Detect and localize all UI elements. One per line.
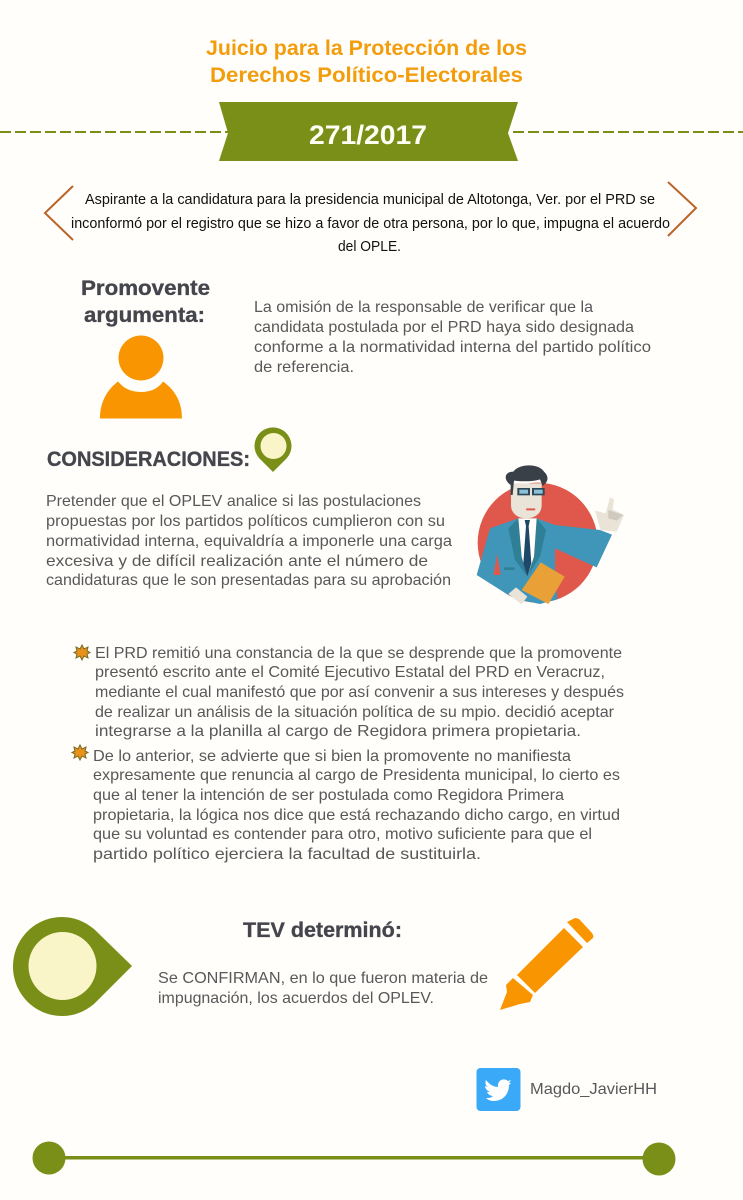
text: promovente argument: La omisión de la responsable de verificar que la [254,299,593,316]
bullet text 2: que su voluntad es contender para otro, motivo suficiente para que el [93,826,592,843]
text: consideraciones: Pretender que el OPLEV analice si las postulaciones [46,493,421,510]
text: ruling: impugnación, los acuerdos del OPLEV. [158,990,434,1007]
icon: bullet star 1 [74,645,90,660]
text: promovente argument: de referencia. [254,359,354,376]
title: Juicio para la Protección de los [206,37,527,60]
heading: Promovente argumenta [81,276,210,327]
bullet text 2: De lo anterior, se advierte que si bien la promovente no manifiesta [93,748,571,765]
text: promovente argument [254,299,651,376]
bullet text 2: partido político ejerciera la facultad de sustituirla. [93,846,481,863]
bullet text 1: mediante el cual manifestó que por así convenir a sus intereses y después [95,684,624,701]
heading: Promovente argumenta: argumenta: [84,303,205,327]
icon: pencil [500,918,593,1010]
text: consideraciones: propuestas por los partidos políticos cumplieron con su [46,513,445,530]
intro with chevrons [45,182,696,255]
bullet text 1: de realizar un análisis de la situación política de su mpio. decidió aceptar [95,704,615,721]
icon: person [100,336,182,418]
icon: small map pin [254,427,292,472]
bullet text 1: El PRD remitió una constancia de la que se desprende que la promovente [95,645,622,662]
bullet text 2: expresamente que renuncia al cargo de Presidenta municipal, lo cierto es [93,767,620,784]
heading: TEV determinó: TEV determinó: [243,918,402,942]
intro with chevrons: del OPLE. [338,238,401,255]
bullet text 1: presentó escrito ante el Comité Ejecutivo Estatal del PRD en Veracruz, [95,664,605,681]
icon: twitter [476,1068,520,1111]
icon: bullet star 2 [72,745,88,760]
intro with chevrons: Aspirante a la candidatura para la presidencia municipal de Altotonga, Ver. por el PRD se [85,191,655,208]
text: ruling: Se CONFIRMAN, en lo que fueron materia de [158,970,488,987]
text: consideraciones: normatividad interna, equivaldría a imponerle una carga [46,533,452,550]
bullet list [72,645,624,863]
title: Derechos Político-Electorales [210,64,523,87]
text: ruling [158,970,488,1007]
text: promovente argument: conforme a la normatividad interna del partido político [254,339,651,356]
text: consideraciones [46,493,452,589]
text: promovente argument: candidata postulada por el PRD haya sido designada [254,319,634,336]
bullet text 2 [93,748,620,863]
bullet text 2: que al tener la intención de ser postulada como Regidora Primera [93,787,564,804]
bullet text 1 [95,645,624,740]
heading: consideraciones: CONSIDERACIONES: [47,447,250,471]
footer line with dots [32,1142,676,1176]
icon: large map pin [13,917,132,1016]
illustration: man in suit [477,465,624,604]
twitter handle: Magdo_JavierHH [530,1081,657,1098]
bullet text 2: propietaria, la lógica nos dice que está rechazando dicho cargo, en virtud [93,807,620,824]
banner: case number [219,102,518,161]
text: consideraciones: candidaturas que le son presentadas para su aprobación [46,572,451,589]
banner: case number: 271/2017 [309,120,427,150]
title [206,37,527,87]
bullet text 1: integrarse a la planilla al cargo de Regidora primera propietaria. [95,723,581,740]
text: consideraciones: excesiva y de difícil realización ante el número de [46,553,428,570]
intro with chevrons: inconformó por el registro que se hizo a favor de otra persona, por lo que, impugna el acuerdo [71,215,670,232]
heading: Promovente argumenta: Promovente [81,276,210,300]
